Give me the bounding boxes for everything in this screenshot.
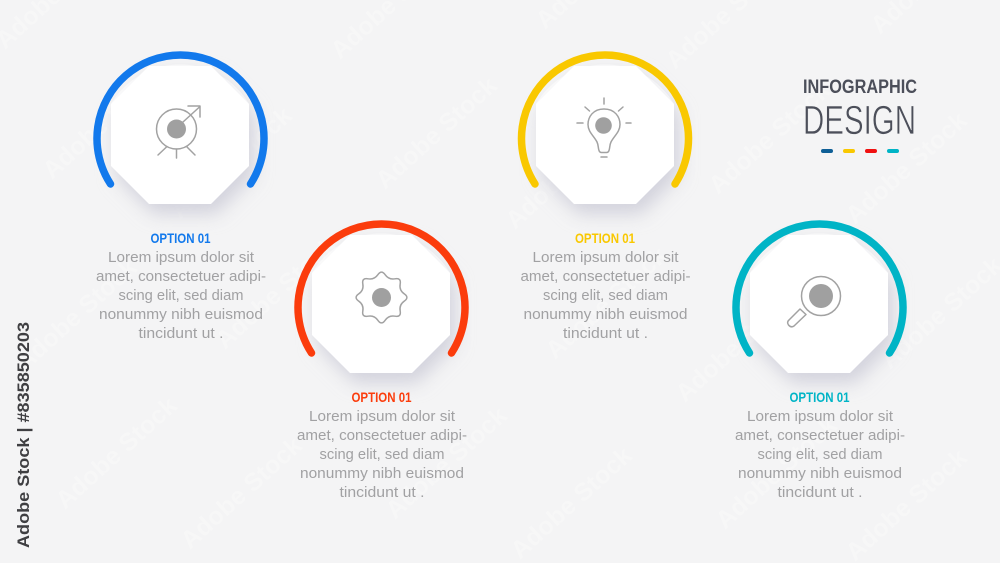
arc blue xyxy=(97,55,264,184)
text block xyxy=(297,409,467,501)
text block: amet, consectetuer adipi- xyxy=(735,428,905,444)
octagon card red xyxy=(312,233,455,383)
watermark pattern: Adobe Stock xyxy=(670,284,803,407)
text block: Lorem ipsum dolor sit xyxy=(309,409,455,425)
watermark pattern: Adobe Stock xyxy=(710,411,843,534)
text block xyxy=(735,409,905,501)
text block: amet, consectetuer adipi- xyxy=(96,269,266,285)
text block: nonummy nibh euismod xyxy=(738,466,902,482)
text block: amet, consectetuer adipi- xyxy=(297,428,467,444)
text block: amet, consectetuer adipi- xyxy=(520,269,691,285)
watermark pattern: Adobe Stock xyxy=(840,443,973,563)
watermark pattern: Adobe Stock xyxy=(210,231,343,354)
text block: Lorem ipsum dolor sit xyxy=(108,250,254,266)
icon: magnifying glass xyxy=(788,276,840,327)
watermark pattern: Adobe Stock xyxy=(505,441,638,563)
text block: nonummy nibh euismod xyxy=(524,307,688,323)
text block: nonummy nibh euismod xyxy=(99,307,263,323)
text block: scing elit, sed diam xyxy=(320,447,444,463)
watermark pattern: Adobe Stock xyxy=(10,253,143,376)
watermark pattern: Adobe Stock xyxy=(50,391,183,514)
octagon card yellow xyxy=(536,64,679,214)
watermark pattern: Adobe Stock xyxy=(37,61,170,184)
watermark pattern: Adobe Stock xyxy=(380,401,513,524)
heading: OPTION 01 xyxy=(790,389,850,405)
watermark pattern: Adobe Stock xyxy=(540,241,673,364)
heading: OPTION 01 xyxy=(150,230,211,246)
text block xyxy=(520,250,691,342)
title: DESIGN xyxy=(803,97,916,143)
octagon card blue xyxy=(111,64,254,214)
panel: option 3 yellow xyxy=(520,55,691,342)
icon: gear xyxy=(356,272,407,323)
arc yellow xyxy=(522,55,689,184)
stock id label: Adobe Stock | #835850203 xyxy=(14,322,33,548)
text block: tincidunt ut . xyxy=(563,326,648,342)
text block: Lorem ipsum dolor sit xyxy=(747,409,893,425)
text block: tincidunt ut . xyxy=(138,326,224,342)
title xyxy=(803,77,917,143)
arc red xyxy=(298,224,465,353)
heading: OPTION 01 xyxy=(575,230,635,246)
heading: OPTION 01 xyxy=(352,389,412,405)
text block: scing elit, sed diam xyxy=(758,447,882,463)
icon: target with arrow xyxy=(156,106,200,158)
watermark pattern: Adobe Stock xyxy=(165,101,298,224)
panel: option 2 red xyxy=(297,224,467,501)
panel: option 1 blue xyxy=(96,55,266,342)
watermark pattern: Adobe Stock xyxy=(175,431,308,554)
arc teal xyxy=(736,224,903,353)
octagon card teal xyxy=(750,233,893,383)
text block: tincidunt ut . xyxy=(340,485,424,501)
text block: scing elit, sed diam xyxy=(543,288,668,304)
icon: light bulb xyxy=(577,98,631,157)
watermark pattern: Adobe Stock xyxy=(840,106,973,229)
panel: option 4 teal xyxy=(735,224,905,501)
text block xyxy=(96,250,266,342)
text block: tincidunt ut . xyxy=(778,485,862,501)
text block: Lorem ipsum dolor sit xyxy=(532,250,678,266)
text block: scing elit, sed diam xyxy=(118,288,244,304)
title: INFOGRAPHIC xyxy=(803,77,917,98)
text block: nonummy nibh euismod xyxy=(300,466,464,482)
watermark pattern: Adobe Stock xyxy=(703,76,836,199)
legend colour dashes xyxy=(823,149,897,153)
watermark pattern: Adobe Stock xyxy=(500,111,633,234)
watermark pattern: Adobe Stock xyxy=(370,71,503,194)
